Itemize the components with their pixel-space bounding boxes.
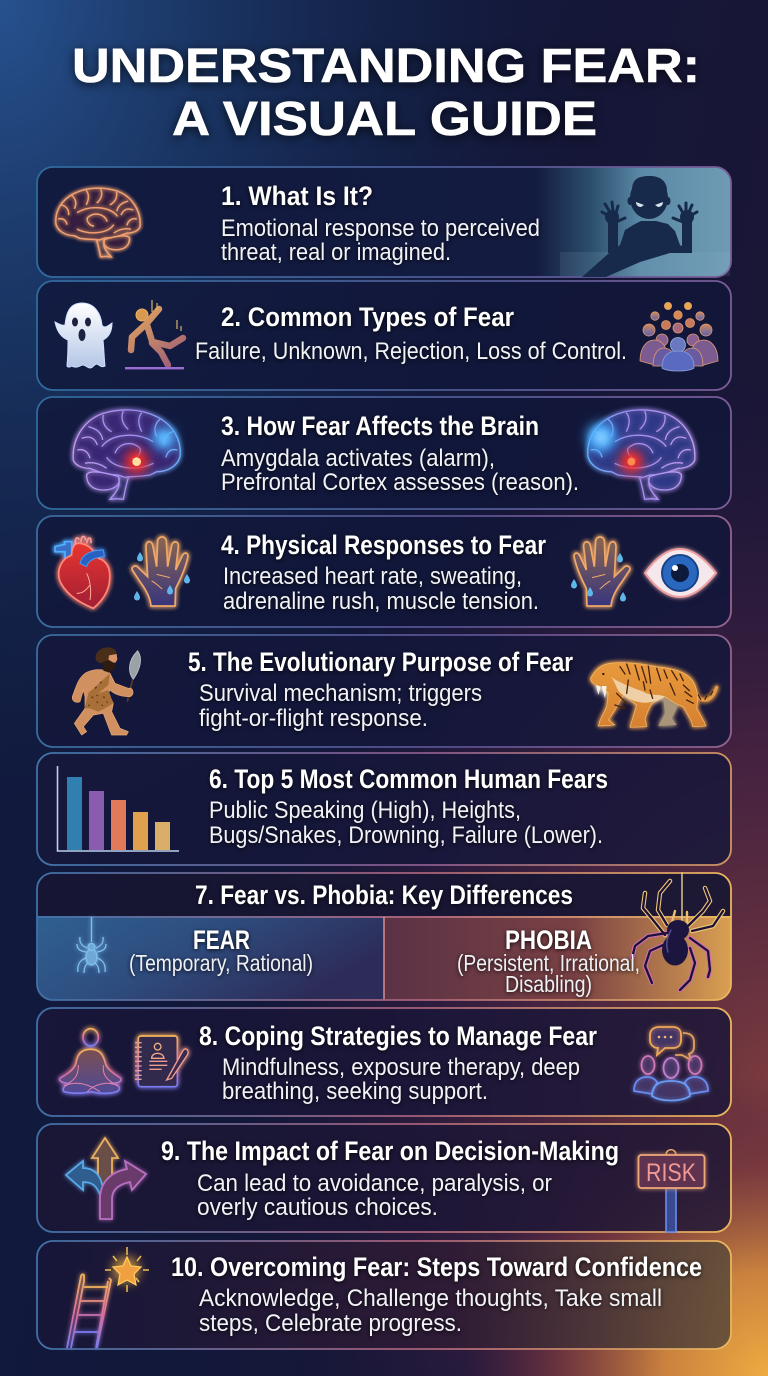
- fear half: [37, 917, 384, 1000]
- fear label: [129, 925, 313, 976]
- text 10: steps, Celebrate progress.: [199, 1310, 462, 1337]
- text 3: Prefrontal Cortex assesses (reason).: [221, 469, 579, 496]
- icon: large spider: [632, 873, 723, 990]
- heading 5: 5. The Evolutionary Purpose of Fear: [188, 647, 573, 677]
- icon: caveman: [72, 647, 141, 735]
- phobia label: Disabling): [505, 971, 592, 997]
- text 4: adrenaline rush, muscle tension.: [223, 588, 539, 615]
- panel 2: common types: [37, 281, 731, 390]
- heading 6: 6. Top 5 Most Common Human Fears: [209, 764, 608, 794]
- text 6: Bugs/Snakes, Drowning, Failure (Lower).: [209, 822, 603, 849]
- phobia half: [384, 917, 731, 1000]
- heading 2: 2. Common Types of Fear: [221, 302, 514, 332]
- heading 1: 1. What Is It?: [221, 181, 373, 211]
- icon: ladder and star: [67, 1247, 149, 1348]
- text 5: [199, 680, 482, 732]
- text 8: breathing, seeking support.: [222, 1078, 488, 1105]
- heading 9: 9. The Impact of Fear on Decision-Making: [161, 1136, 619, 1166]
- heading 3: 3. How Fear Affects the Brain: [221, 411, 539, 441]
- icon: crowd: [640, 302, 718, 371]
- panel 8: coping: [37, 1008, 731, 1116]
- chat dots: [658, 1036, 672, 1038]
- heading 10: 10. Overcoming Fear: Steps Toward Confidence: [171, 1252, 702, 1282]
- title: A VISUAL GUIDE: [172, 93, 597, 146]
- icon: heart: [55, 537, 110, 608]
- icon: notebook: [135, 1036, 188, 1087]
- text 5: fight-or-flight response.: [199, 705, 428, 732]
- icon: risk sign: RISK: [646, 1159, 696, 1187]
- panel 10: overcoming: [37, 1241, 731, 1349]
- icon: small spider: [77, 917, 106, 973]
- phobia label: [457, 925, 640, 997]
- phobia label: (Persistent, Irrational,: [457, 950, 640, 976]
- text 1: threat, real or imagined.: [221, 239, 451, 266]
- text 10: [199, 1285, 662, 1337]
- shadow figure: [582, 176, 697, 277]
- text 9: overly cautious choices.: [197, 1194, 438, 1221]
- icon: ghost: [55, 303, 112, 368]
- text 1: [221, 215, 540, 266]
- title: UNDERSTANDING FEAR:: [72, 40, 700, 93]
- icon: sabre-tooth tiger: [591, 663, 717, 727]
- text 4: Increased heart rate, sweating,: [223, 563, 522, 590]
- icon: eye: [645, 549, 716, 597]
- title: [72, 40, 700, 146]
- icon: brain with amygdala left: [73, 410, 180, 499]
- text 4: [223, 563, 539, 615]
- icon: sweaty hand: [132, 537, 188, 606]
- icon: crossroads arrows: [66, 1138, 146, 1219]
- text 3: Amygdala activates (alarm),: [221, 445, 495, 472]
- panel 4: physical: [37, 516, 731, 627]
- panel 1: what is it: [37, 167, 731, 277]
- text 8: Mindfulness, exposure therapy, deep: [222, 1054, 580, 1081]
- text 9: [197, 1170, 552, 1221]
- heading 4: 4. Physical Responses to Fear: [221, 530, 546, 560]
- sweat drops left: [134, 552, 190, 600]
- bar chart: [58, 766, 179, 851]
- text 5: Survival mechanism; triggers: [199, 680, 482, 707]
- icon: support group: [634, 1027, 708, 1100]
- heading 8: 8. Coping Strategies to Manage Fear: [199, 1021, 597, 1051]
- icon: meditation: [60, 1029, 121, 1093]
- fear label: FEAR: [193, 925, 250, 955]
- panel 5: evolutionary: [37, 635, 731, 747]
- sweat drops right: [571, 553, 626, 602]
- fear label: (Temporary, Rational): [129, 950, 313, 976]
- icon: sweaty hand right: [574, 537, 630, 606]
- heading 7: 7. Fear vs. Phobia: Key Differences: [195, 880, 573, 910]
- text 6: [209, 797, 603, 849]
- text 6: Public Speaking (High), Heights,: [209, 797, 521, 824]
- text 3: [221, 445, 579, 496]
- panel 7: fear vs phobia: [37, 873, 731, 1000]
- phobia label: PHOBIA: [505, 925, 592, 955]
- icon: brain outline: [56, 188, 140, 257]
- text 10: Acknowledge, Challenge thoughts, Take small: [199, 1285, 662, 1312]
- icon: falling person: [125, 300, 184, 369]
- text 9: Can lead to avoidance, paralysis, or: [197, 1170, 552, 1197]
- text 8: [222, 1054, 580, 1105]
- panel 6: top fears: [37, 753, 731, 865]
- panel 3: brain: [37, 397, 731, 509]
- icon: brain with amygdala right: [587, 410, 695, 499]
- panel 9: decision making: [37, 1124, 731, 1232]
- icon: risk sign: [638, 1150, 704, 1232]
- text 1: Emotional response to perceived: [221, 215, 540, 242]
- text 2: Failure, Unknown, Rejection, Loss of Control.: [195, 338, 627, 365]
